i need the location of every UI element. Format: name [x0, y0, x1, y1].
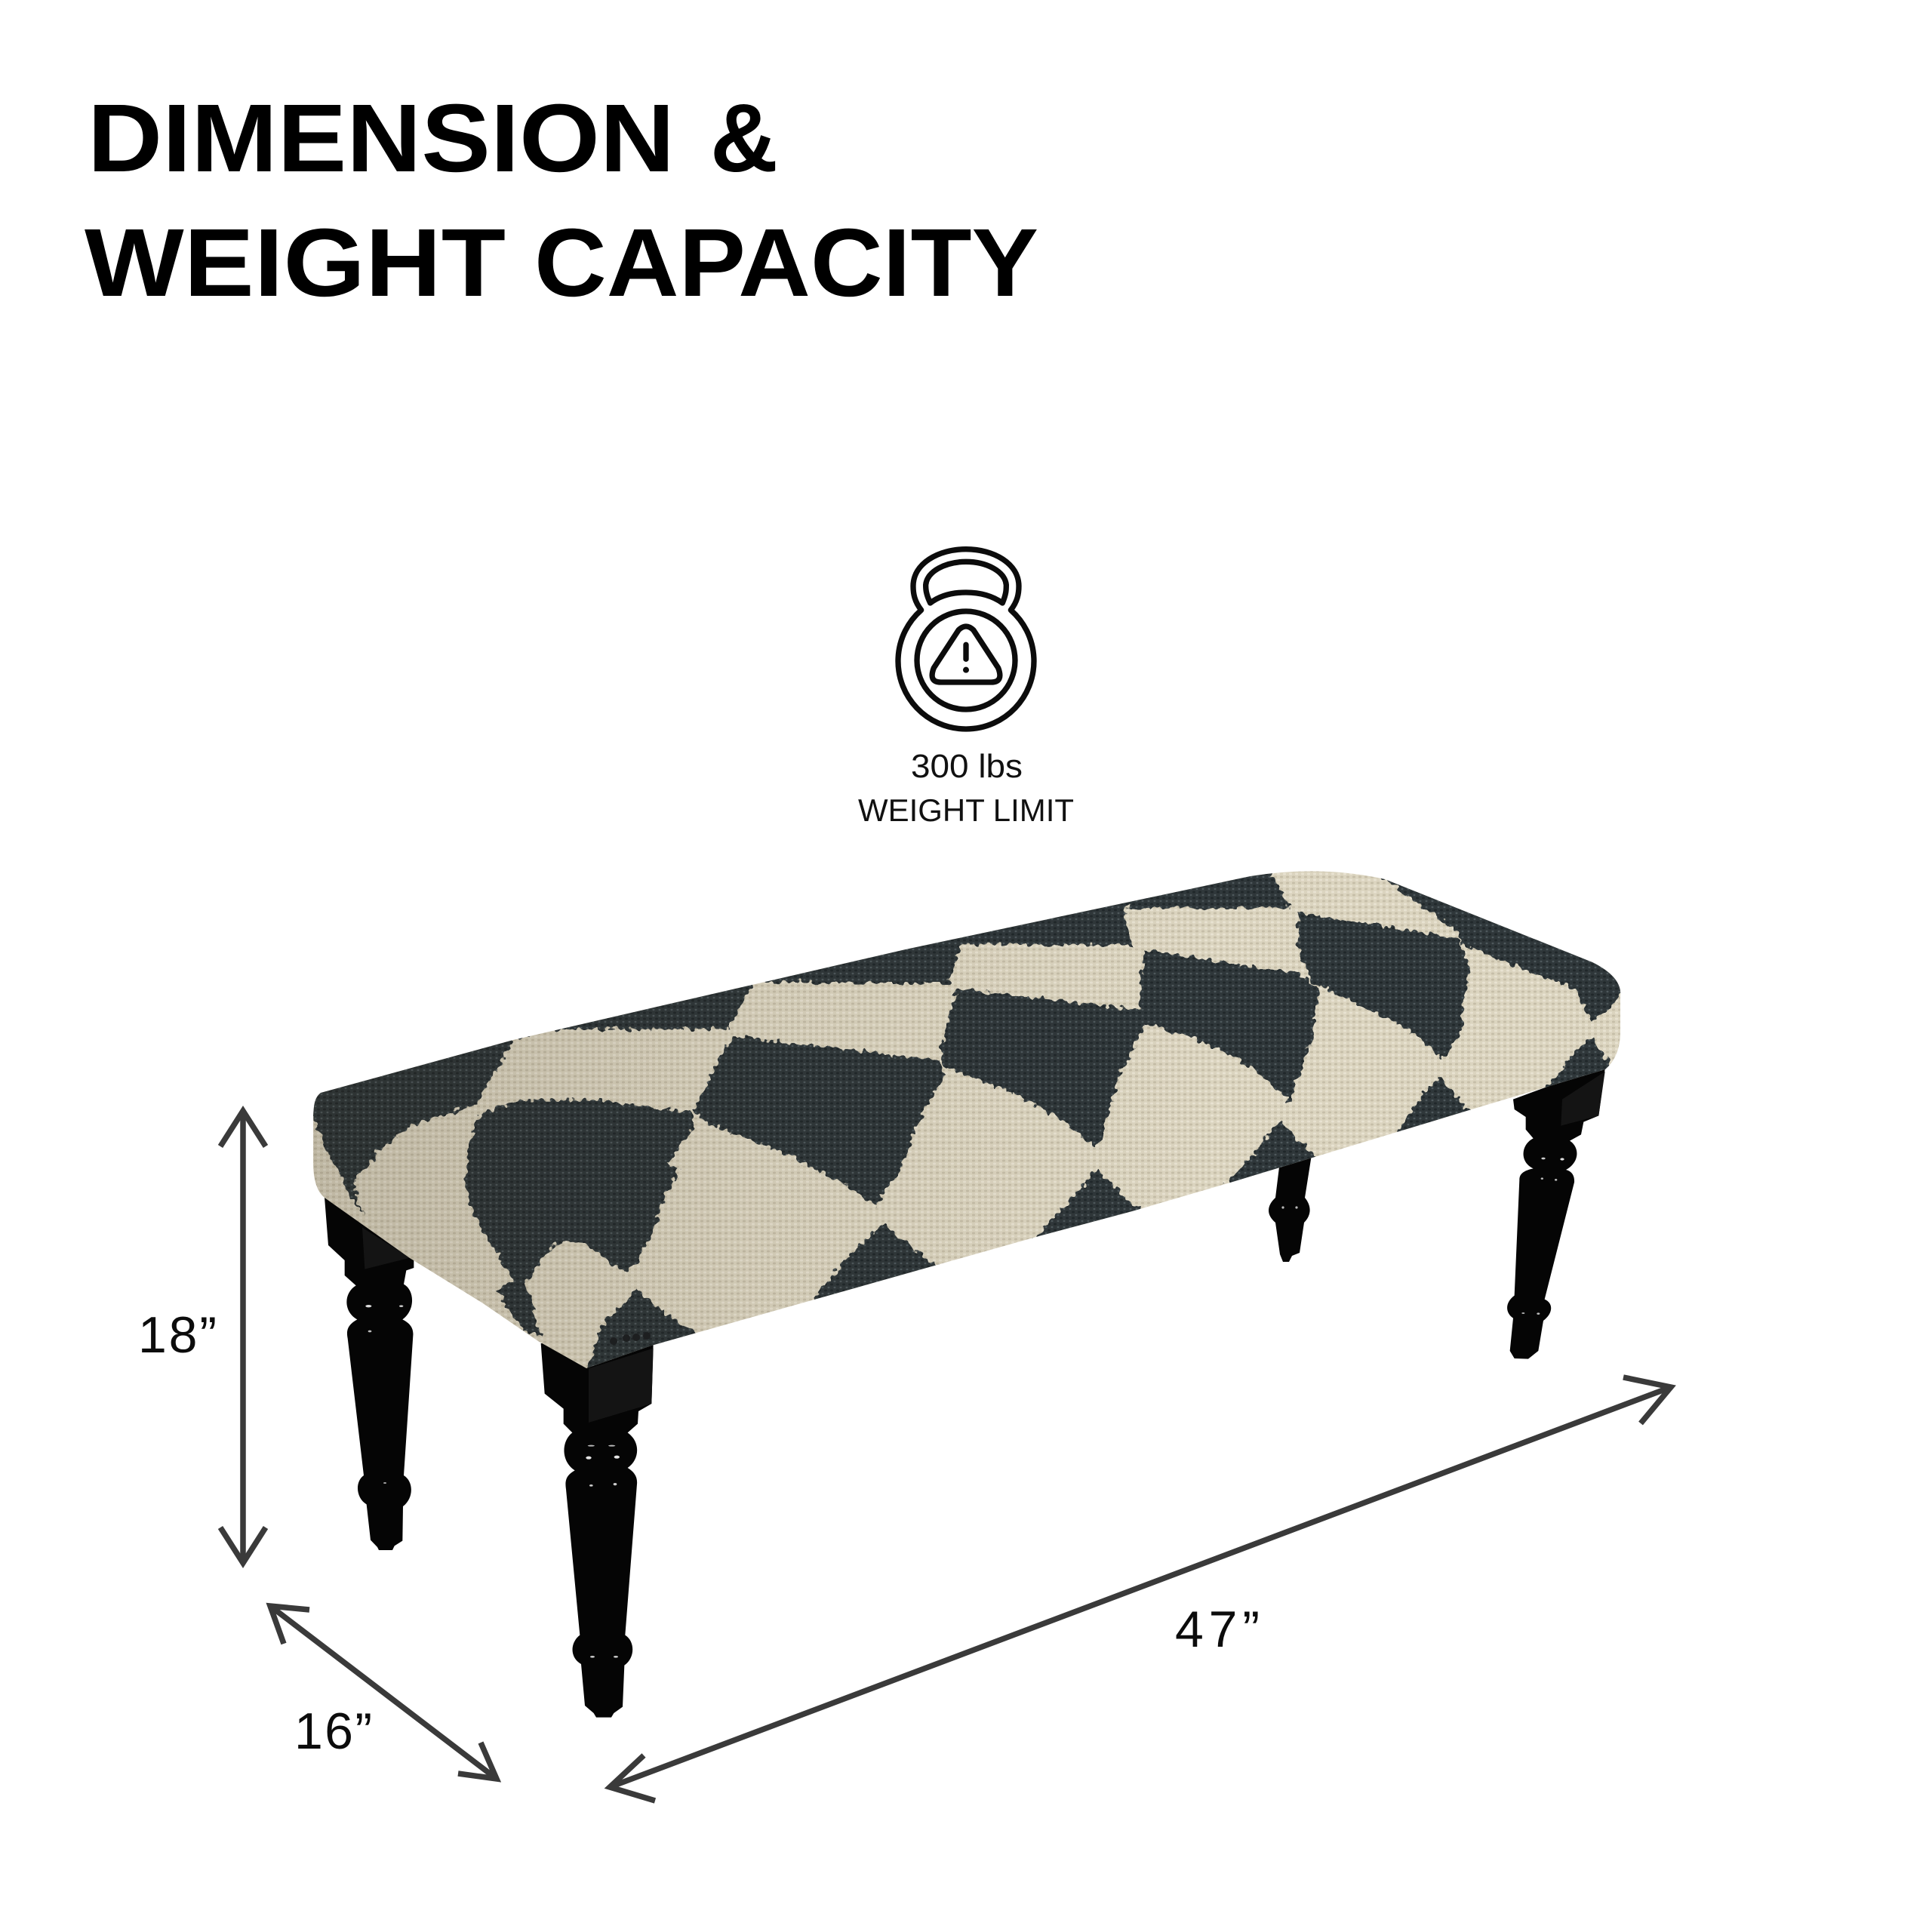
back leg	[1269, 1155, 1312, 1262]
title: CAPACITY	[534, 209, 1038, 317]
arrow: height	[220, 1111, 266, 1563]
weight limit text: 300 lbs	[911, 748, 1023, 785]
seat cream fabric	[302, 860, 1630, 1381]
title: DIMENSION	[88, 85, 675, 192]
icon: kettlebell weight limit	[898, 549, 1034, 729]
title: &	[710, 85, 778, 192]
arrow: length	[610, 1377, 1671, 1801]
weight limit text: WEIGHT LIMIT	[858, 792, 1074, 828]
label: 16 inches: 16”	[294, 1703, 372, 1760]
title: WEIGHT	[85, 209, 506, 317]
bench seat with diamond kilim pattern	[302, 860, 1630, 1381]
infographic canvas	[85, 104, 1676, 1804]
title	[85, 85, 1038, 317]
seat dark diamond pattern	[302, 860, 1630, 1381]
arrow: depth	[270, 1606, 497, 1779]
nail heads	[610, 1332, 651, 1345]
front leg	[541, 1343, 654, 1718]
right leg	[1507, 1069, 1605, 1359]
weight limit text	[858, 748, 1074, 828]
label: 18 inches: 18”	[138, 1306, 217, 1364]
label: 47 inches: 47”	[1175, 1601, 1260, 1658]
left leg	[325, 1198, 414, 1550]
